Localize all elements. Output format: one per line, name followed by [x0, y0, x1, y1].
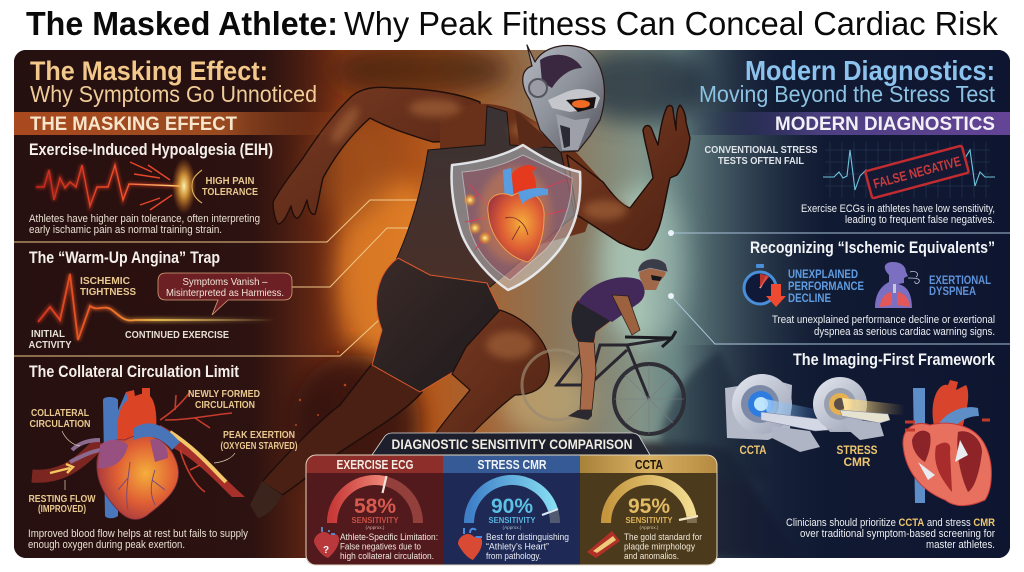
text: cmr note: “Athlety’s Heart” — [486, 542, 549, 552]
label: resting flow: RESTING FLOW — [28, 493, 96, 505]
column: stress cmr — [443, 455, 580, 565]
section: collateral circulation: The Collateral Circulation Limit — [29, 363, 239, 381]
connector lines — [14, 200, 1010, 356]
panel: modern diagnostics — [690, 55, 1010, 551]
text: collateral description — [28, 528, 249, 551]
band: the masking effect: THE MASKING EFFECT — [30, 114, 237, 135]
gauge: 58 percent: SENSITIVITY — [352, 515, 399, 525]
panel border — [306, 455, 717, 565]
text: ecg limitation: Athlete-Specific Limitation: — [340, 532, 438, 543]
chart: warm-up angina curve — [38, 274, 275, 340]
column: exercise ecg: EXERCISE ECG — [336, 458, 414, 472]
text: ccta note — [624, 532, 703, 562]
gauge: 95 percent: (Approx.) — [640, 525, 659, 530]
label: ccta scanner: CCTA — [740, 445, 766, 457]
label: peak exertion — [214, 429, 298, 463]
illustration: heart with vessels — [32, 388, 245, 519]
column: ccta — [580, 455, 717, 565]
label: resting flow — [28, 480, 96, 515]
gauge: 95 percent: 95% — [628, 495, 670, 518]
icon: stopwatch with down arrow — [744, 264, 786, 307]
text: cmr note: Best for distinguishing — [486, 532, 569, 543]
label: unexplained performance decline: UNEXPLAINED — [788, 269, 858, 281]
left arm — [273, 87, 480, 224]
shorts — [372, 258, 500, 392]
neck — [515, 110, 555, 150]
text: ecg limitation — [340, 532, 438, 562]
label: resting flow: (IMPROVED) — [38, 503, 86, 515]
section: imaging-first framework: The Imaging-First Framework — [793, 351, 996, 369]
label: exertional dyspnea: DYSPNEA — [929, 286, 976, 298]
text: ecg description: leading to frequent false negatives. — [845, 214, 995, 226]
label: high pain tolerance: HIGH PAIN — [206, 175, 254, 187]
label: conventional stress tests: CONVENTIONAL STRESS — [704, 144, 818, 156]
text: equivalents description: Treat unexplained performance decline or exertional — [772, 314, 995, 326]
label: high pain tolerance: TOLERANCE — [202, 186, 258, 198]
rider torso — [578, 277, 645, 322]
gauge: 95 percent — [606, 480, 698, 530]
callout: symptoms vanish — [158, 273, 292, 315]
label: ischemic tightness: TIGHTNESS — [80, 286, 136, 298]
gauge: 90 percent: (Approx.) — [503, 525, 522, 530]
label: peak exertion: PEAK EXERTION — [223, 429, 295, 441]
label: ischemic tightness — [80, 275, 136, 298]
label: initial activity: ACTIVITY — [28, 339, 72, 351]
chart: ecg grid with false negative stamp: FALSE NEGATIVE — [872, 154, 963, 191]
tab heading — [372, 433, 650, 455]
upper torso — [440, 104, 603, 250]
text: ccta note: and anomalios. — [624, 551, 679, 562]
chart: pain ecg with burst — [36, 158, 202, 214]
label: collateral circulation: CIRCULATION — [30, 418, 90, 430]
label: exertional dyspnea: EXERTIONAL — [929, 275, 991, 287]
gauge: 58 percent — [332, 476, 418, 530]
label: initial activity: INITIAL — [31, 328, 66, 340]
connector dots right — [668, 230, 674, 299]
label: unexplained performance decline: PERFORMANCE — [788, 281, 864, 293]
text: ecg description: Exercise ECGs in athletes have low sensitivity, — [801, 203, 995, 215]
shield with heart — [452, 145, 580, 290]
label: ischemic tightness: ISCHEMIC — [80, 275, 130, 287]
gauge: 95 percent: SENSITIVITY — [626, 515, 673, 525]
heading: masking effect: Why Symptoms Go Unnoticed — [30, 81, 317, 107]
athlete runner — [250, 45, 690, 518]
text: cmr note — [486, 532, 569, 562]
panel: masking effect — [14, 56, 334, 551]
text: ccta note: The gold standard for — [624, 532, 703, 543]
section: exercise-induced hypoalgesia: Exercise-Induced Hypoalgesia (EIH) — [29, 141, 273, 159]
callout: symptoms vanish: Symptoms Vanish – — [182, 276, 268, 288]
label: unexplained performance decline: DECLINE — [788, 293, 831, 305]
band: modern diagnostics: MODERN DIAGNOSTICS — [775, 114, 995, 135]
heading: masking effect — [30, 56, 317, 107]
text: collateral description: enough oxygen during peak exertion. — [28, 539, 185, 551]
text: hypoalgesia description: Athletes have higher pain tolerance, often interpreting — [29, 213, 260, 225]
section: ischemic equivalents — [744, 239, 995, 338]
text: ccta note: plaqde mirrphology — [624, 542, 695, 552]
panel: diagnostic sensitivity comparison — [306, 433, 717, 565]
gauge: 58 percent: (Approx.) — [366, 525, 385, 530]
text: imaging description: over traditional symptom-based screening for — [800, 528, 995, 540]
section: warm-up angina — [28, 249, 292, 351]
label: high pain tolerance — [202, 175, 258, 198]
text: equivalents description: dyspnea as serious cardiac warning signs. — [814, 326, 995, 338]
label: stress cmr scanner: CMR — [844, 457, 871, 469]
rear shoe — [250, 481, 282, 518]
callout: symptoms vanish: Misinterpreted as Harmiess. — [166, 287, 284, 299]
illustration: stress cmr scanner — [813, 377, 905, 440]
front leg — [420, 310, 549, 456]
illustration: ccta scanner — [725, 374, 830, 452]
label: stress cmr scanner: STRESS — [836, 445, 878, 457]
text: collateral description: Improved blood flow helps at rest but fails to supply — [28, 528, 249, 540]
label: newly formed circulation: CIRCULATION — [195, 399, 255, 411]
cyclist — [522, 259, 684, 434]
label: initial activity — [28, 328, 72, 351]
label: conventional stress tests — [704, 144, 818, 167]
gauge: 90 percent: 90% — [491, 495, 533, 518]
illustration: cross-section heart — [903, 380, 991, 506]
text: imaging description: Clinicians should prioritize CCTA and stress CMR — [786, 517, 995, 529]
label: newly formed circulation: NEWLY FORMED — [188, 388, 260, 400]
column: stress cmr: STRESS CMR — [478, 458, 546, 472]
heading: masking effect: The Masking Effect: — [30, 56, 268, 86]
muscle highlights — [327, 99, 627, 359]
band: the masking effect — [14, 112, 334, 135]
column: exercise ecg — [306, 455, 443, 565]
section: conventional stress tests — [704, 142, 995, 226]
rider shorts — [571, 300, 612, 343]
masked helmet — [523, 45, 604, 152]
text: ecg limitation: high collateral circulation. — [340, 551, 434, 562]
right arm — [567, 105, 690, 250]
text: ecg description — [801, 203, 995, 226]
icon: heart with question mark: ? — [323, 545, 329, 556]
bike wheels and frame — [522, 338, 684, 434]
handlebars — [625, 331, 676, 347]
gauge: 90 percent: SENSITIVITY — [488, 515, 536, 525]
label: unexplained performance decline — [788, 269, 864, 305]
singlet — [395, 106, 575, 287]
icon: artery with plaque — [587, 531, 620, 558]
title: Why Peak Fitness Can Conceal Cardiac Risk — [344, 5, 998, 42]
band: modern diagnostics — [690, 112, 1010, 135]
icon: athlete's heart — [458, 528, 482, 560]
rider arm — [612, 295, 640, 335]
rider leg — [578, 340, 596, 410]
label: continued exercise: CONTINUED EXERCISE — [125, 329, 229, 341]
label: newly formed circulation — [188, 388, 260, 411]
tab heading: DIAGNOSTIC SENSITIVITY COMPARISON — [392, 436, 632, 452]
label: conventional stress tests: TESTS OFTEN FAIL — [718, 155, 805, 167]
rider head — [639, 261, 666, 290]
text: hypoalgesia description — [29, 213, 260, 236]
section: exercise-induced hypoalgesia — [29, 141, 273, 236]
chart: ecg grid with false negative stamp — [823, 142, 995, 198]
heading: modern diagnostics: Modern Diagnostics: — [745, 55, 995, 86]
text: ecg limitation: False negatives due to — [340, 542, 421, 552]
label: exertional dyspnea — [929, 275, 991, 298]
icon: lungs person — [875, 262, 919, 308]
text: cmr note: from pathology. — [486, 551, 541, 562]
text: imaging description: master athletes. — [926, 539, 995, 551]
column: ccta: CCTA — [635, 458, 663, 472]
title: The Masked Athlete: — [26, 5, 338, 42]
text: imaging description — [786, 517, 995, 551]
label: collateral circulation: COLLATERAL — [31, 407, 89, 419]
heading: modern diagnostics — [699, 55, 995, 107]
section: imaging-first framework — [725, 351, 996, 551]
label: peak exertion: (OXYGEN STARVED) — [220, 440, 298, 452]
section: warm-up angina: The “Warm-Up Angina” Trap — [29, 249, 220, 267]
gauge: 58 percent: 58% — [354, 495, 396, 518]
label: stress cmr scanner — [836, 445, 878, 469]
label: collateral circulation — [30, 407, 90, 446]
gauge: 90 percent — [469, 480, 558, 530]
text: hypoalgesia description: early ischamic pain as normal training strain. — [29, 224, 222, 236]
heading: modern diagnostics: Moving Beyond the Stress Test — [699, 81, 995, 107]
text: equivalents description — [772, 314, 995, 338]
title — [26, 5, 998, 42]
section: collateral circulation — [28, 363, 298, 551]
rear leg — [262, 360, 422, 495]
